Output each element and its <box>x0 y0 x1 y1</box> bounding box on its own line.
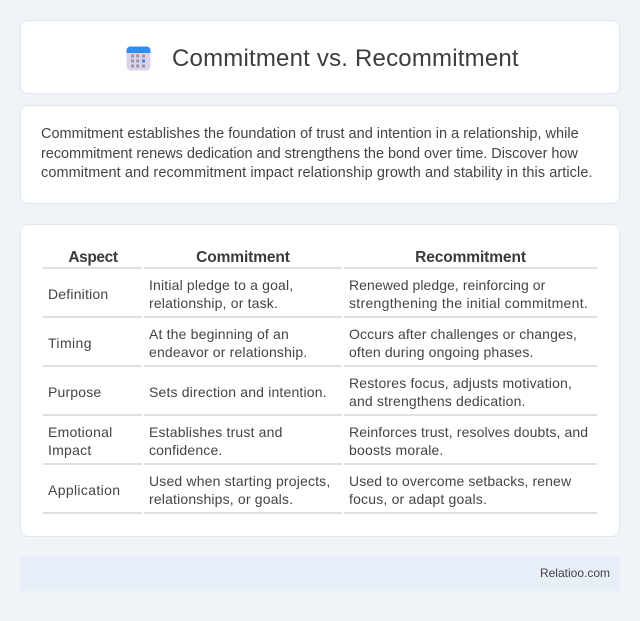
row: Emotional Impact: boosts morale. <box>349 442 444 458</box>
intro paragraph: commitment and recommitment impact relationship growth and stability in this article. <box>41 165 593 181</box>
row: Emotional Impact: Impact <box>48 442 92 458</box>
row: Emotional Impact: Reinforces trust, resolves doubts, and <box>349 424 588 440</box>
row: Timing: endeavor or relationship. <box>149 344 307 360</box>
row: Purpose: Sets direction and intention. <box>149 384 327 400</box>
header panel <box>20 20 620 94</box>
intro paragraph: recommitment renews dedication and strengthens the bond over time. Discover how <box>41 146 578 162</box>
row: Purpose: Restores focus, adjusts motivation, <box>349 375 572 391</box>
intro paragraph <box>41 126 593 181</box>
row: Application: relationships, or goals. <box>149 491 293 507</box>
row: Definition: Renewed pledge, reinforcing or <box>349 277 545 293</box>
row: Definition: Initial pledge to a goal, <box>149 277 293 293</box>
title: Commitment vs. Recommitment <box>172 45 519 72</box>
intro paragraph: Commitment establishes the foundation of trust and intention in a relationship, while <box>41 126 579 142</box>
row: Application: Used to overcome setbacks, renew <box>349 473 571 489</box>
row: Purpose <box>48 375 572 409</box>
row: Emotional Impact <box>48 424 588 458</box>
row: Emotional Impact: Emotional <box>48 424 113 440</box>
row: Purpose: and strengthens dedication. <box>349 393 526 409</box>
row: Timing <box>48 326 577 360</box>
row: Timing: At the beginning of an <box>149 326 289 342</box>
row: Application: Used when starting projects, <box>149 473 330 489</box>
table header: Aspect <box>68 249 118 266</box>
row: Definition: strengthening the initial commitment. <box>349 295 588 311</box>
row: Definition <box>48 277 588 311</box>
row: Application: Application <box>48 482 120 498</box>
row: Definition: relationship, or task. <box>149 295 278 311</box>
footer bar <box>20 557 620 591</box>
row: Emotional Impact: Establishes trust and <box>149 424 283 440</box>
row: Timing: often during ongoing phases. <box>349 344 534 360</box>
table header: Commitment <box>196 249 290 266</box>
row: Timing: Occurs after challenges or changes, <box>349 326 577 342</box>
row: Application: focus, or adapt goals. <box>349 491 487 507</box>
row: Timing: Timing <box>48 335 92 351</box>
row: Definition: Definition <box>48 286 108 302</box>
footer credit: Relatioo.com <box>540 566 610 580</box>
table header: Recommitment <box>415 249 526 266</box>
comparison table panel <box>20 224 620 537</box>
row: Application <box>48 473 572 507</box>
icon: calendar <box>126 46 150 70</box>
row: Emotional Impact: confidence. <box>149 442 222 458</box>
table header <box>68 249 526 266</box>
row: Purpose: Purpose <box>48 384 101 400</box>
intro text panel <box>20 105 620 204</box>
